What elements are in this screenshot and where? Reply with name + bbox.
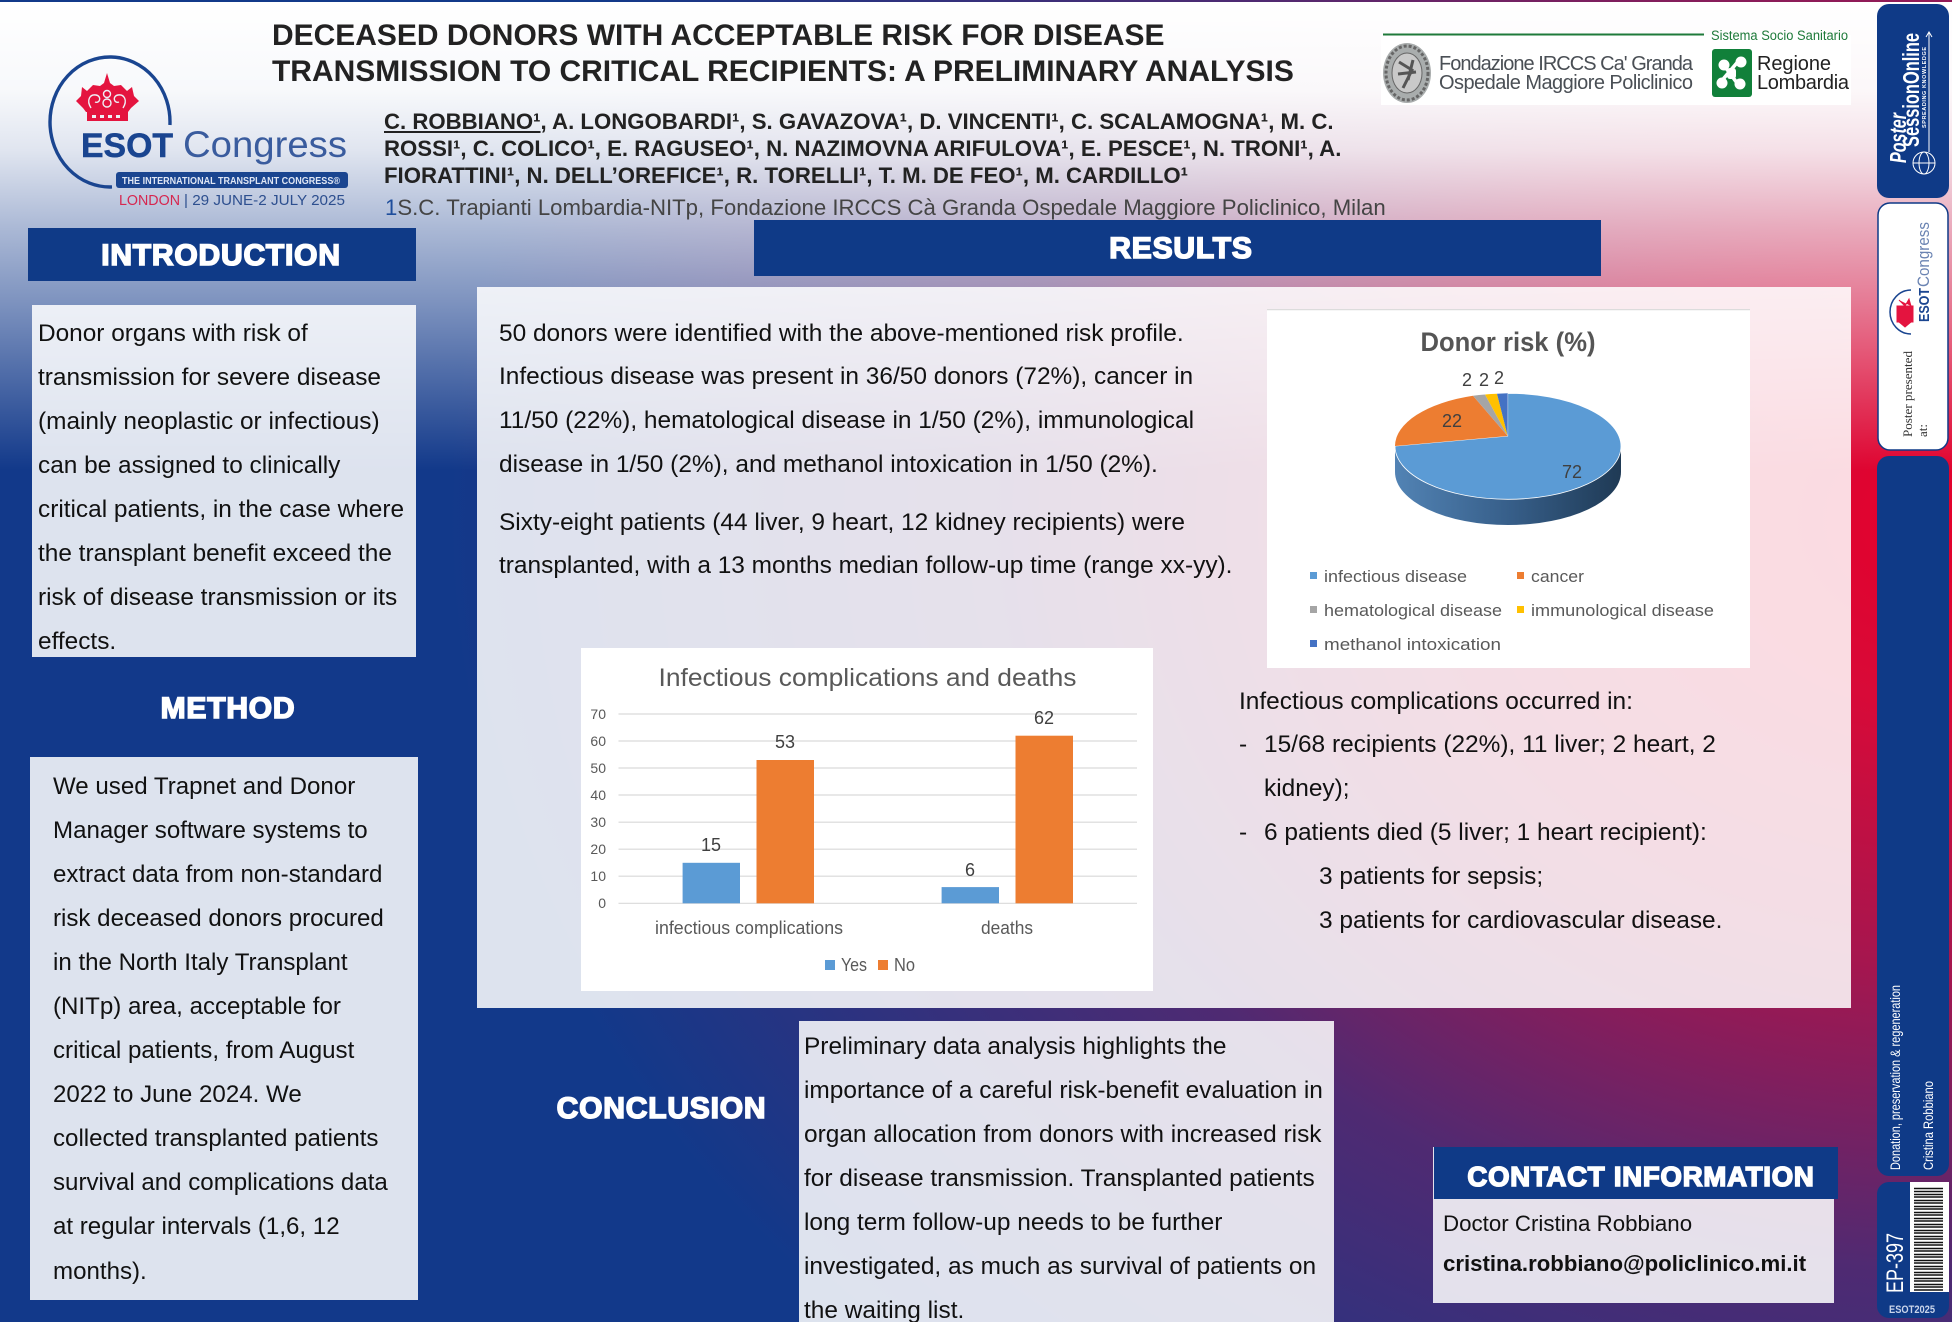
text block: conclusion: organ allocation from donors with increased risk <box>804 1121 1322 1148</box>
sidebar: poster code and barcode: EP-397 <box>1882 1233 1909 1293</box>
logo: ESOT Congress: Congress <box>183 124 347 165</box>
sidebar: poster presented at: ESOT <box>1916 288 1933 322</box>
text block: method: in the North Italy Transplant <box>53 949 348 976</box>
legend: yes no: Yes <box>841 955 867 975</box>
text block: results summary: 50 donors were identified with the above-mentioned risk profile. <box>499 320 1184 346</box>
sidebar: poster presented at: at: <box>1915 424 1930 437</box>
text block: method: 2022 to June 2024. We <box>53 1081 302 1108</box>
slice: cancer <box>1395 396 1508 446</box>
sidebar: poster session online <box>1877 4 1949 198</box>
text block: introduction <box>38 320 404 655</box>
text block: infectious complications: 3 patients for sepsis; <box>1319 863 1543 890</box>
text block: results patients: transplanted, with a 13 months median follow-up time (range xx-yy). <box>499 552 1232 579</box>
text block: introduction: effects. <box>38 628 116 655</box>
text block: infectious complications: 6 patients died (5 liver; 1 heart recipient): <box>1264 819 1707 846</box>
authors: ROSSI¹, C. COLICO¹, E. RAGUSEO¹, N. NAZIMOVNA ARIFULOVA¹, E. PESCE¹, N. TRONI¹, A. <box>384 136 1341 161</box>
heading: method: METHOD <box>161 692 295 725</box>
text block: introduction: transmission for severe disease <box>38 364 381 391</box>
title: TRANSMISSION TO CRITICAL RECIPIENTS: A PRELIMINARY ANALYSIS <box>272 55 1294 88</box>
logo: Fondazione and Regione Lombardia: Lombardia <box>1757 72 1850 94</box>
title <box>272 19 1294 88</box>
bar chart: infectious complications and deaths: 0 <box>598 895 606 911</box>
text block: introduction: can be assigned to clinically <box>38 452 340 479</box>
icon: globe and arrow <box>1913 32 1935 174</box>
panel: method text <box>30 757 418 1300</box>
text block: results summary: 11/50 (22%), hematological disease in 1/50 (2%), immunological <box>499 407 1194 434</box>
text block: method: risk deceased donors procured <box>53 905 384 932</box>
sidebar: topic and author <box>1877 456 1949 1176</box>
text block: method <box>53 773 388 1285</box>
text block: infectious complications <box>1239 688 1722 934</box>
sidebar: poster code and barcode: ESOT2025 <box>1889 1304 1935 1316</box>
affiliation: 1S.C. Trapianti Lombardia-NITp, Fondazione IRCCS Cà Granda Ospedale Maggiore Policlinico, Milan <box>385 195 1386 220</box>
slice: methanol intoxication <box>1497 393 1508 436</box>
legend: donor risk: cancer <box>1531 567 1584 586</box>
barcode <box>1914 1188 1943 1290</box>
panel: contact information <box>1433 1147 1834 1303</box>
text block: method: We used Trapnet and Donor <box>53 773 355 800</box>
bars: yes <box>683 863 999 903</box>
heading bar: results <box>754 220 1601 276</box>
data labels: 6 <box>965 860 975 880</box>
bar chart: infectious complications and deaths: 50 <box>590 760 606 776</box>
data labels: 62 <box>1034 708 1054 728</box>
text block: infectious complications: kidney); <box>1264 775 1350 802</box>
legend: yes no: No <box>894 955 915 975</box>
text block: infectious complications: Infectious complications occurred in: <box>1239 688 1633 714</box>
bar chart: infectious complications and deaths: 60 <box>590 733 606 749</box>
text block: method: collected transplanted patients <box>53 1125 378 1152</box>
sidebar: poster presented at <box>1877 202 1949 451</box>
title: DECEASED DONORS WITH ACCEPTABLE RISK FOR DISEASE <box>272 19 1164 52</box>
legend: yes no <box>825 955 915 975</box>
text block: introduction: the transplant benefit exceed the <box>38 540 392 567</box>
text block: method: survival and complications data <box>53 1169 388 1196</box>
legend: donor risk: immunological disease <box>1531 601 1714 620</box>
slice: infectious disease <box>1395 393 1621 499</box>
text block: results summary: Infectious disease was present in 36/50 donors (72%), cancer in <box>499 363 1193 390</box>
sidebar: poster presented at: Congress <box>1914 222 1933 287</box>
text: contact name: Doctor Cristina Robbiano <box>1443 1211 1692 1236</box>
logo: ESOT Congress: ESOT <box>81 127 173 165</box>
text block: introduction: (mainly neoplastic or infectious) <box>38 408 380 435</box>
pie chart: donor risk <box>1267 309 1750 668</box>
logo: ESOT Congress: LONDON <box>119 192 180 209</box>
text block: introduction: risk of disease transmission or its <box>38 584 397 611</box>
text block: infectious complications: - <box>1239 731 1247 758</box>
bar chart: infectious complications and deaths: 40 <box>590 787 606 803</box>
sidebar: topic and author: Donation, preservation & regeneration <box>1887 985 1903 1170</box>
panel: introduction text <box>32 305 416 657</box>
text block: results patients <box>499 508 1232 579</box>
bar chart: infectious complications and deaths: 20 <box>590 841 606 857</box>
text block: conclusion: Preliminary data analysis highlights the <box>804 1032 1226 1060</box>
text: contact email: cristina.robbiano@policlinico.mi.it <box>1443 1251 1806 1276</box>
legend: donor risk <box>1310 567 1714 654</box>
icon: crown <box>76 73 139 121</box>
text block: method: months). <box>53 1258 147 1285</box>
bar chart: infectious complications and deaths: Infectious complications and deaths <box>658 664 1076 692</box>
text block: conclusion: long term follow-up needs to be further <box>804 1209 1222 1236</box>
text block: introduction: critical patients, in the case where <box>38 496 404 523</box>
text block: method: at regular intervals (1,6, 12 <box>53 1213 340 1240</box>
text block: method: critical patients, from August <box>53 1037 354 1064</box>
legend: donor risk: hematological disease <box>1324 601 1502 620</box>
authors <box>384 109 1341 188</box>
text block: method: (NITp) area, acceptable for <box>53 993 341 1020</box>
sidebar: poster session online: Poster <box>1885 112 1911 163</box>
logo: ESOT Congress <box>48 55 348 209</box>
slice: hematological disease <box>1473 394 1508 436</box>
logo: Fondazione and Regione Lombardia <box>1381 30 1851 105</box>
sidebar: poster session online: SPREADING KNOWLEDGE <box>1922 47 1928 128</box>
data labels: 15 <box>701 835 721 855</box>
sidebar: poster presented at: Poster presented <box>1900 350 1915 437</box>
text block: conclusion: importance of a careful risk-benefit evaluation in <box>804 1077 1323 1104</box>
authors: C. ROBBIANO¹, A. LONGOBARDI¹, S. GAVAZOVA¹, D. VINCENTI¹, C. SCALAMOGNA¹, M. C. <box>384 109 1334 134</box>
text block: infectious complications: - <box>1239 819 1247 846</box>
heading bar: contact information <box>1434 1147 1838 1199</box>
logo: Fondazione and Regione Lombardia: Ospedale Maggiore Policlinico <box>1439 72 1693 94</box>
pie chart: donor risk: 2 <box>1479 370 1489 390</box>
text block: conclusion: investigated, as much as survival of patients on <box>804 1253 1316 1280</box>
logo: Fondazione and Regione Lombardia: Fondazione IRCCS Ca' Granda <box>1439 53 1694 75</box>
text block: results patients: Sixty-eight patients (44 liver, 9 heart, 12 kidney recipients) were <box>499 508 1185 536</box>
icon: Lombardia rose <box>1712 49 1752 97</box>
text block: infectious complications: 3 patients for cardiovascular disease. <box>1319 907 1722 934</box>
heading: results: RESULTS <box>1109 232 1253 265</box>
text block: method: Manager software systems to <box>53 817 368 844</box>
bar chart: infectious complications and deaths: 30 <box>590 814 606 830</box>
pie chart: donor risk: 2 <box>1462 370 1472 390</box>
legend: donor risk: infectious disease <box>1324 567 1467 586</box>
data labels: 53 <box>775 732 795 752</box>
pie chart: donor risk: 2 <box>1494 368 1504 388</box>
logo: ESOT Congress: | 29 JUNE-2 JULY 2025 <box>184 192 345 209</box>
pie chart: donor risk: Donor risk (%) <box>1420 327 1596 357</box>
heading: introduction: INTRODUCTION <box>101 239 341 272</box>
text block: introduction: Donor organs with risk of <box>38 320 308 347</box>
text block: infectious complications: 15/68 recipients (22%), 11 liver; 2 heart, 2 <box>1264 731 1716 758</box>
heading: contact: CONTACT INFORMATION <box>1467 1161 1815 1192</box>
heading bar: introduction <box>28 228 416 281</box>
authors: FIORATTINI¹, N. DELL’OREFICE¹, R. TORELLI¹, T. M. DE FEO¹, M. CARDILLO¹ <box>384 163 1188 188</box>
data labels <box>701 708 1054 880</box>
bar chart: infectious complications and deaths: infectious complications <box>655 918 843 938</box>
text block: results summary: disease in 1/50 (2%), and methanol intoxication in 1/50 (2%). <box>499 451 1158 478</box>
pie chart: donor risk: 22 <box>1442 411 1462 431</box>
pie chart: donor risk: 72 <box>1562 462 1582 482</box>
bar chart: infectious complications and deaths <box>581 648 1153 991</box>
sidebar: poster code and barcode <box>1877 1182 1949 1318</box>
legend: donor risk: methanol intoxication <box>1324 635 1501 654</box>
panel: conclusion <box>799 1021 1334 1322</box>
text block: results summary <box>499 320 1194 478</box>
text block: conclusion: for disease transmission. Transplanted patients <box>804 1165 1315 1192</box>
slice: immunological disease <box>1485 394 1508 436</box>
text block: conclusion <box>804 1032 1323 1322</box>
pie side <box>1395 446 1621 525</box>
bar chart: infectious complications and deaths: deaths <box>981 918 1033 938</box>
panel: results <box>477 287 1851 1008</box>
text block: method: extract data from non-standard <box>53 861 382 888</box>
bar chart: infectious complications and deaths: 10 <box>590 868 606 884</box>
bar chart: infectious complications and deaths: 70 <box>590 706 606 722</box>
sidebar: topic and author: Cristina Robbiano <box>1920 1081 1936 1170</box>
heading: conclusion: CONCLUSION <box>557 1092 766 1125</box>
bars: no <box>756 736 1073 903</box>
logo: Fondazione and Regione Lombardia: Regione <box>1757 53 1831 75</box>
icon: seal <box>1383 43 1431 103</box>
